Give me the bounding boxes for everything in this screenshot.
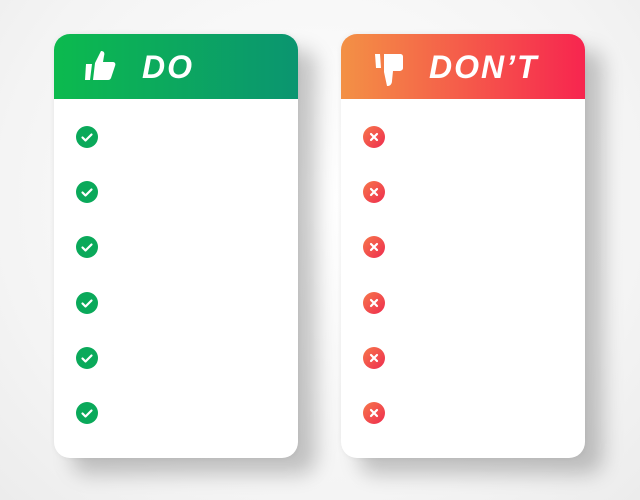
header: dont xyxy=(341,34,585,99)
heading: DON'T: DON’T xyxy=(429,49,539,85)
heading: DO: DO xyxy=(142,49,194,85)
panel: do xyxy=(54,34,298,458)
icon: thumbs down xyxy=(375,54,403,86)
list: check icons xyxy=(76,126,98,424)
icon: thumbs up xyxy=(85,51,116,80)
header: do xyxy=(54,34,298,99)
list: cross icons xyxy=(363,126,385,424)
panel: dont xyxy=(341,34,585,458)
